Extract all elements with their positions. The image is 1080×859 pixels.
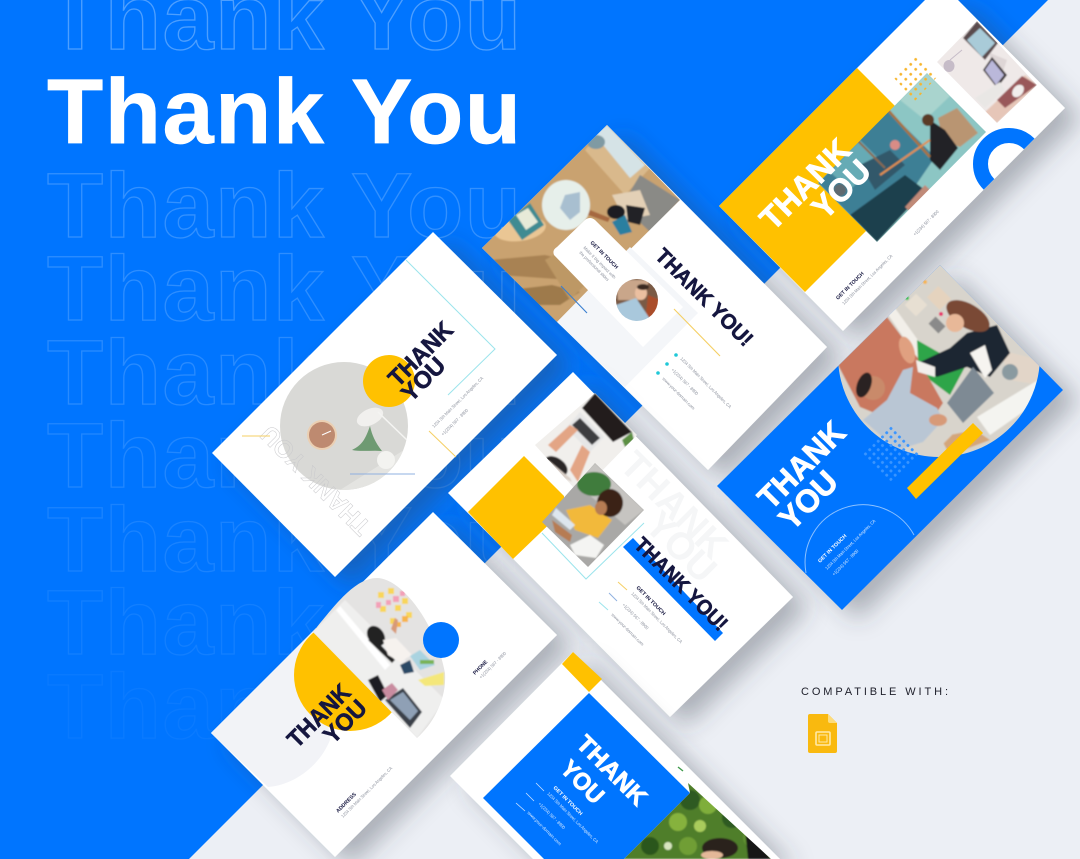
heading: thank you: THANK: [282, 679, 357, 753]
contact text: GET IN TOUCH: [635, 585, 667, 617]
contact text: +1(234) 567 - 8900: [912, 209, 940, 237]
contact text: +1(234) 567 - 8900: [440, 407, 470, 437]
outlined repeated thank you pattern: Thank You: [47, 238, 521, 340]
faint dot pattern: [862, 425, 920, 482]
panel: slide with clock: [212, 232, 557, 577]
card text: GET IN TOUCH: [589, 240, 619, 271]
contact text: 1234 Sth Main Street, Los Angeles, CA: [824, 518, 877, 571]
yellow tab: [562, 652, 602, 692]
title: Thank You: [47, 61, 521, 163]
phone text: +1(234) 567 - 8900: [478, 650, 508, 680]
heading: thank you: THANK: [383, 316, 459, 392]
contact text: GET IN TOUCH: [817, 533, 848, 564]
photo: woman in yellow shirt: [542, 463, 644, 567]
yellow bar: [907, 423, 983, 499]
contact text: 1234 Sth Main Street, Los Angeles, CA: [546, 791, 599, 844]
cyan bracket: [542, 523, 644, 579]
contact text: 1234 Sth Main Street, Los Angeles, CA: [841, 253, 894, 306]
contact text: www.your-domain.com: [526, 810, 563, 846]
blue circle: [423, 622, 459, 658]
heading: thank you: THANK: [571, 730, 653, 812]
outlined repeated thank you pattern: Thank You: [47, 155, 521, 257]
contact text: +1(234) 567 - 8900: [831, 548, 860, 577]
panel: slide with yellow square: [448, 372, 793, 717]
white contact card: [553, 218, 683, 347]
panel: slide with sticky notes: [211, 512, 557, 857]
address text: ADDRESS: [335, 791, 358, 814]
contact text: [835, 209, 940, 306]
pale panel: [557, 247, 698, 387]
heading: thank you: YOU: [555, 755, 609, 810]
ghost heading: YOU: [637, 504, 724, 591]
address text: 1234 Sth Main Street, Los Angeles, CA: [340, 766, 393, 819]
dots pattern: [893, 55, 937, 101]
compatible with label: COMPATIBLE WITH:: [801, 686, 948, 698]
arc outline: [805, 505, 914, 573]
panel: blue and foliage slide: [450, 652, 780, 859]
contact text: +1(234) 567 - 8900: [537, 801, 567, 831]
phone text: PHONE: [472, 659, 490, 676]
cyan bracket: [406, 260, 495, 395]
icon: google slides: [808, 714, 837, 753]
icon: lamp: [944, 50, 962, 72]
outlined repeated thank you pattern: Thank You: [47, 489, 521, 591]
contact text: www.your-domain.com: [610, 612, 645, 647]
accent lines: [516, 783, 544, 811]
outlined repeated thank you pattern: Thank You: [47, 656, 521, 758]
heading: thank you!: THANK YOU!: [629, 533, 732, 636]
yellow circle: [363, 355, 415, 407]
heading: thank you: YOU: [396, 352, 451, 407]
photo: office with city view: [815, 70, 990, 245]
outlined repeated thank you pattern: Thank You: [47, 405, 521, 507]
tiny green sprig: [678, 767, 683, 771]
contact text: [817, 518, 877, 577]
outlined repeated thank you pattern: Thank You: [47, 572, 521, 674]
outlined mirrored heading: THANK YOU: [255, 420, 376, 541]
panel: blue high-five slide: [717, 255, 1063, 610]
contact text: 1234 Sth Main Street, Los Angeles, CA: [630, 591, 683, 644]
heading: thank you: YOU: [771, 463, 845, 537]
accent lines: [242, 431, 456, 474]
panel: yellow office slide: [719, 0, 1065, 331]
ghost heading: THANK: [612, 444, 736, 568]
panel: slide with thank you and round portrait: [480, 120, 827, 470]
photo: laptop hands: [535, 393, 637, 487]
heading: thank you: THANK: [752, 132, 858, 237]
yellow square: [468, 456, 564, 559]
outlined repeated thank you pattern: [47, 0, 521, 758]
photo: overhead lounge: [480, 120, 685, 325]
contact list: 1234 Sth Main Street, Los Angeles, CA: [679, 356, 732, 409]
yellow half circle: [294, 632, 392, 731]
contact text: [610, 585, 683, 647]
contact text: GET IN TOUCH: [552, 785, 584, 817]
contact text: 1234 Sth Main Street, Los Angeles, CA: [431, 376, 484, 429]
heading: thank you: YOU: [318, 695, 373, 749]
heading: thank you!: THANK YOU!: [650, 244, 757, 351]
blue bar: [623, 538, 723, 641]
contact list: www.your-domain.com: [661, 376, 696, 411]
photo: woman at whiteboard: [313, 578, 446, 738]
yellow block: [719, 68, 943, 292]
card text: Make it big impact with: [582, 245, 617, 280]
contact text: GET IN TOUCH: [835, 271, 866, 301]
blue ring: [980, 136, 1038, 192]
pale curved shape: [211, 628, 330, 787]
accent lines: [561, 286, 720, 356]
photo: round portrait: [616, 279, 658, 321]
blue panel: [483, 693, 690, 859]
photo: colleagues high five: [838, 265, 1040, 457]
photo: desk with clock: [280, 362, 408, 490]
contact text: +1(234) 567 - 8900: [621, 602, 650, 631]
contact list: [656, 353, 732, 411]
heading: thank you: THANK: [750, 414, 852, 516]
photo: man in foliage: [620, 780, 775, 859]
heading: thank you: YOU: [804, 152, 878, 226]
accent lines: [599, 582, 627, 610]
contact text: [526, 785, 599, 846]
contact list: +1(234) 567 - 8900: [670, 367, 700, 397]
outlined repeated thank you pattern: Thank You: [47, 322, 521, 424]
photo: desk with monitors: [935, 20, 1040, 125]
card text: the professional slides: [578, 250, 611, 283]
